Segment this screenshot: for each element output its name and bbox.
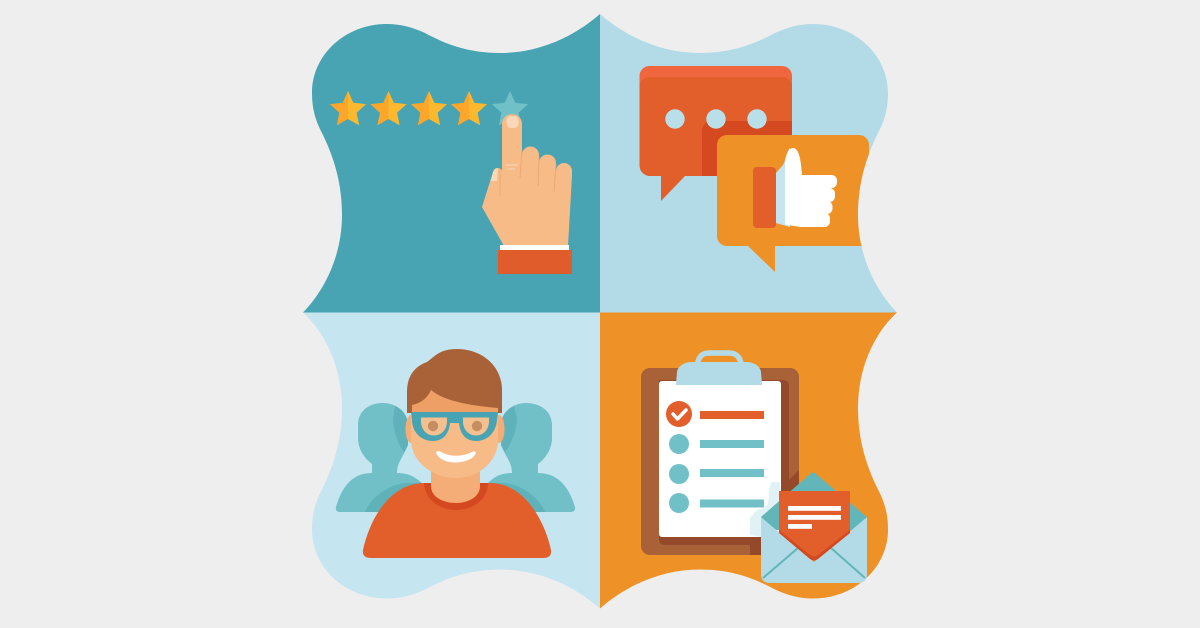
panel: user portrait [303, 312, 600, 608]
icon: clipboard checklist [641, 353, 799, 555]
icon: four filled stars and one empty star [330, 91, 528, 125]
icon: left background figure [336, 403, 422, 512]
icon: right background figure [488, 403, 575, 512]
icon: open envelope with letter [750, 472, 867, 583]
infographic: four-panel quatrefoil [303, 14, 897, 608]
panel: checklist and mail [600, 312, 897, 608]
panel: star rating [303, 14, 600, 312]
panel: speech bubbles [600, 14, 897, 312]
icon: central smiling person with glasses [363, 349, 551, 558]
icon: orange speech bubble with thumbs up [717, 135, 869, 272]
icon: red speech bubble with three dots [640, 66, 792, 201]
icon: pointing hand with red cuff [482, 114, 572, 274]
